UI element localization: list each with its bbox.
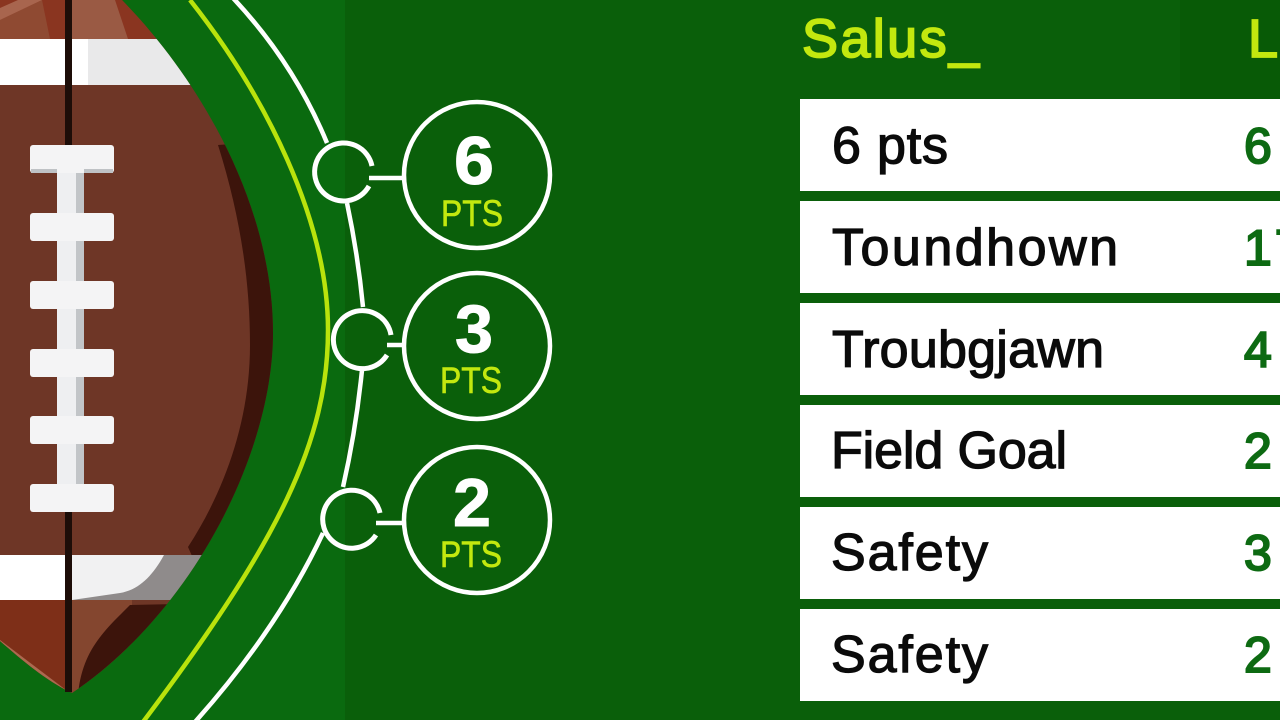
badge ring (404, 102, 550, 248)
row 6: Safety (831, 626, 988, 684)
row 6 (800, 609, 1280, 701)
row 1: 6 pts (832, 117, 948, 175)
row 2: Toundhown (832, 219, 1118, 277)
connector node (323, 490, 380, 548)
connector node (315, 143, 372, 201)
lower white stripe (0, 555, 202, 600)
row 3: 4 (1244, 322, 1272, 378)
row 4 (800, 405, 1280, 497)
table heading right: L (1248, 9, 1278, 69)
value: 3 (455, 291, 493, 367)
white arc (195, 0, 363, 720)
row 5: Safety (831, 524, 988, 582)
table (800, 99, 1280, 701)
badge ring (404, 273, 550, 419)
unit: PTS (441, 193, 503, 234)
row 5: 3 (1244, 525, 1272, 581)
table heading left: Salus_ (802, 9, 980, 69)
upper white stripe (0, 39, 190, 85)
row 6: 2 (1244, 627, 1272, 683)
lime arc (143, 0, 328, 720)
row 3 (800, 303, 1280, 395)
marker: 2 pts (323, 447, 550, 593)
badge ring (404, 447, 550, 593)
row 1 (800, 99, 1280, 191)
connector node (333, 311, 391, 369)
unit: PTS (440, 534, 502, 575)
center seam (65, 0, 72, 145)
value: 2 (453, 465, 491, 541)
laces (30, 145, 114, 512)
ball shadow (78, 144, 273, 688)
football (0, 0, 290, 720)
row 4: 2 (1244, 423, 1272, 479)
row 3: Troubgjawn (832, 321, 1104, 379)
row 4: Field Goal (831, 422, 1067, 480)
marker: 3 pts (333, 273, 550, 419)
row 1: 6 (1244, 118, 1272, 174)
unit: PTS (440, 360, 502, 401)
row 2 (800, 201, 1280, 293)
row 5 (800, 507, 1280, 599)
marker: 6 pts (315, 102, 550, 248)
value: 6 (454, 123, 494, 199)
